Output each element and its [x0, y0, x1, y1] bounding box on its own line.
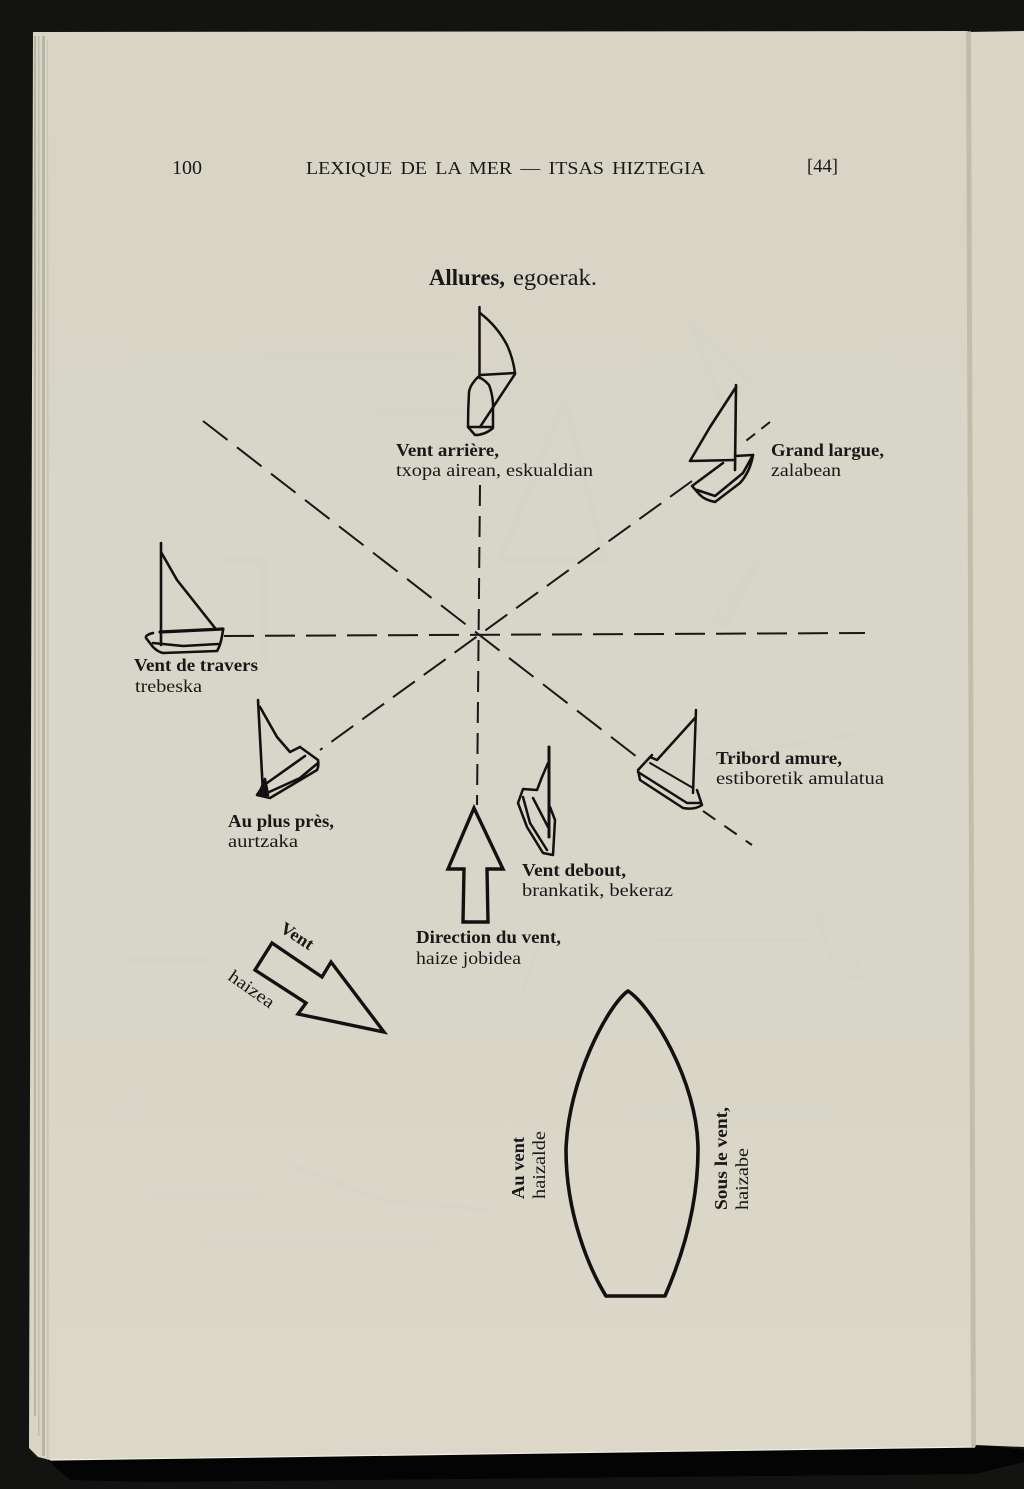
label: au vent: haizalde [529, 1131, 549, 1199]
running header [172, 156, 838, 179]
arrow: wind direction [448, 808, 503, 922]
header title: LEXIQUE DE LA MER — ITSAS HIZTEGIA [306, 158, 705, 178]
boat: vent arriere [468, 307, 515, 435]
page edge stack [29, 32, 60, 1460]
label: tribord amure: estiboretik amulatua [716, 768, 884, 788]
label: direction du vent: haize jobidea [416, 948, 521, 968]
show-through ghost marks [120, 320, 880, 1245]
label: grand largue [771, 440, 884, 480]
label: au plus pres: aurtzaka [228, 831, 298, 851]
title: egoerak. [513, 265, 597, 290]
label: vent arriere: txopa airean, eskualdian [396, 460, 593, 480]
arrow: vent haizea [255, 943, 384, 1032]
label: sous le vent: haizabe [732, 1148, 752, 1210]
hull outline [566, 991, 698, 1296]
gutter shading [966, 31, 976, 1447]
right facing page [968, 31, 1024, 1447]
label: direction du vent [416, 927, 561, 968]
title [429, 265, 597, 290]
label: sous le vent [711, 1107, 752, 1210]
page number: 100 [172, 157, 202, 179]
label: vent de travers: Vent de travers [134, 655, 258, 675]
boat: vent de travers [146, 543, 223, 653]
boat: vent debout [518, 747, 555, 855]
label: au plus pres [228, 811, 334, 851]
label: haizea: haizea [225, 966, 279, 1012]
label: au vent [508, 1131, 549, 1199]
label: vent debout: Vent debout, [522, 860, 626, 880]
boat: tribord amure [638, 710, 702, 809]
label: vent: Vent [277, 918, 318, 954]
label: au vent: Au vent [508, 1137, 528, 1199]
label: au plus pres: Au plus près, [228, 811, 334, 831]
label: grand largue: zalabean [771, 460, 841, 480]
label: vent de travers [134, 655, 258, 696]
label: sous le vent: Sous le vent, [711, 1107, 731, 1210]
label: vent de travers: trebeska [135, 676, 202, 696]
label: direction du vent: Direction du vent, [416, 927, 561, 947]
label: tribord amure: Tribord amure, [716, 748, 842, 768]
title: Allures, [429, 265, 505, 290]
label: grand largue: Grand largue, [771, 440, 884, 460]
dashed wind axes [203, 421, 865, 845]
label: tribord amure [716, 748, 884, 788]
label: vent arriere [396, 440, 593, 480]
boat: au plus pres [257, 700, 318, 798]
label: vent debout [522, 860, 673, 900]
section number: [44] [807, 156, 838, 177]
label: vent arriere: Vent arrière, [396, 440, 499, 460]
bottom shadow [45, 1444, 1024, 1482]
label: vent debout: brankatik, bekeraz [522, 880, 673, 900]
page bottom highlight [50, 1447, 975, 1460]
boat: grand largue [690, 385, 753, 502]
